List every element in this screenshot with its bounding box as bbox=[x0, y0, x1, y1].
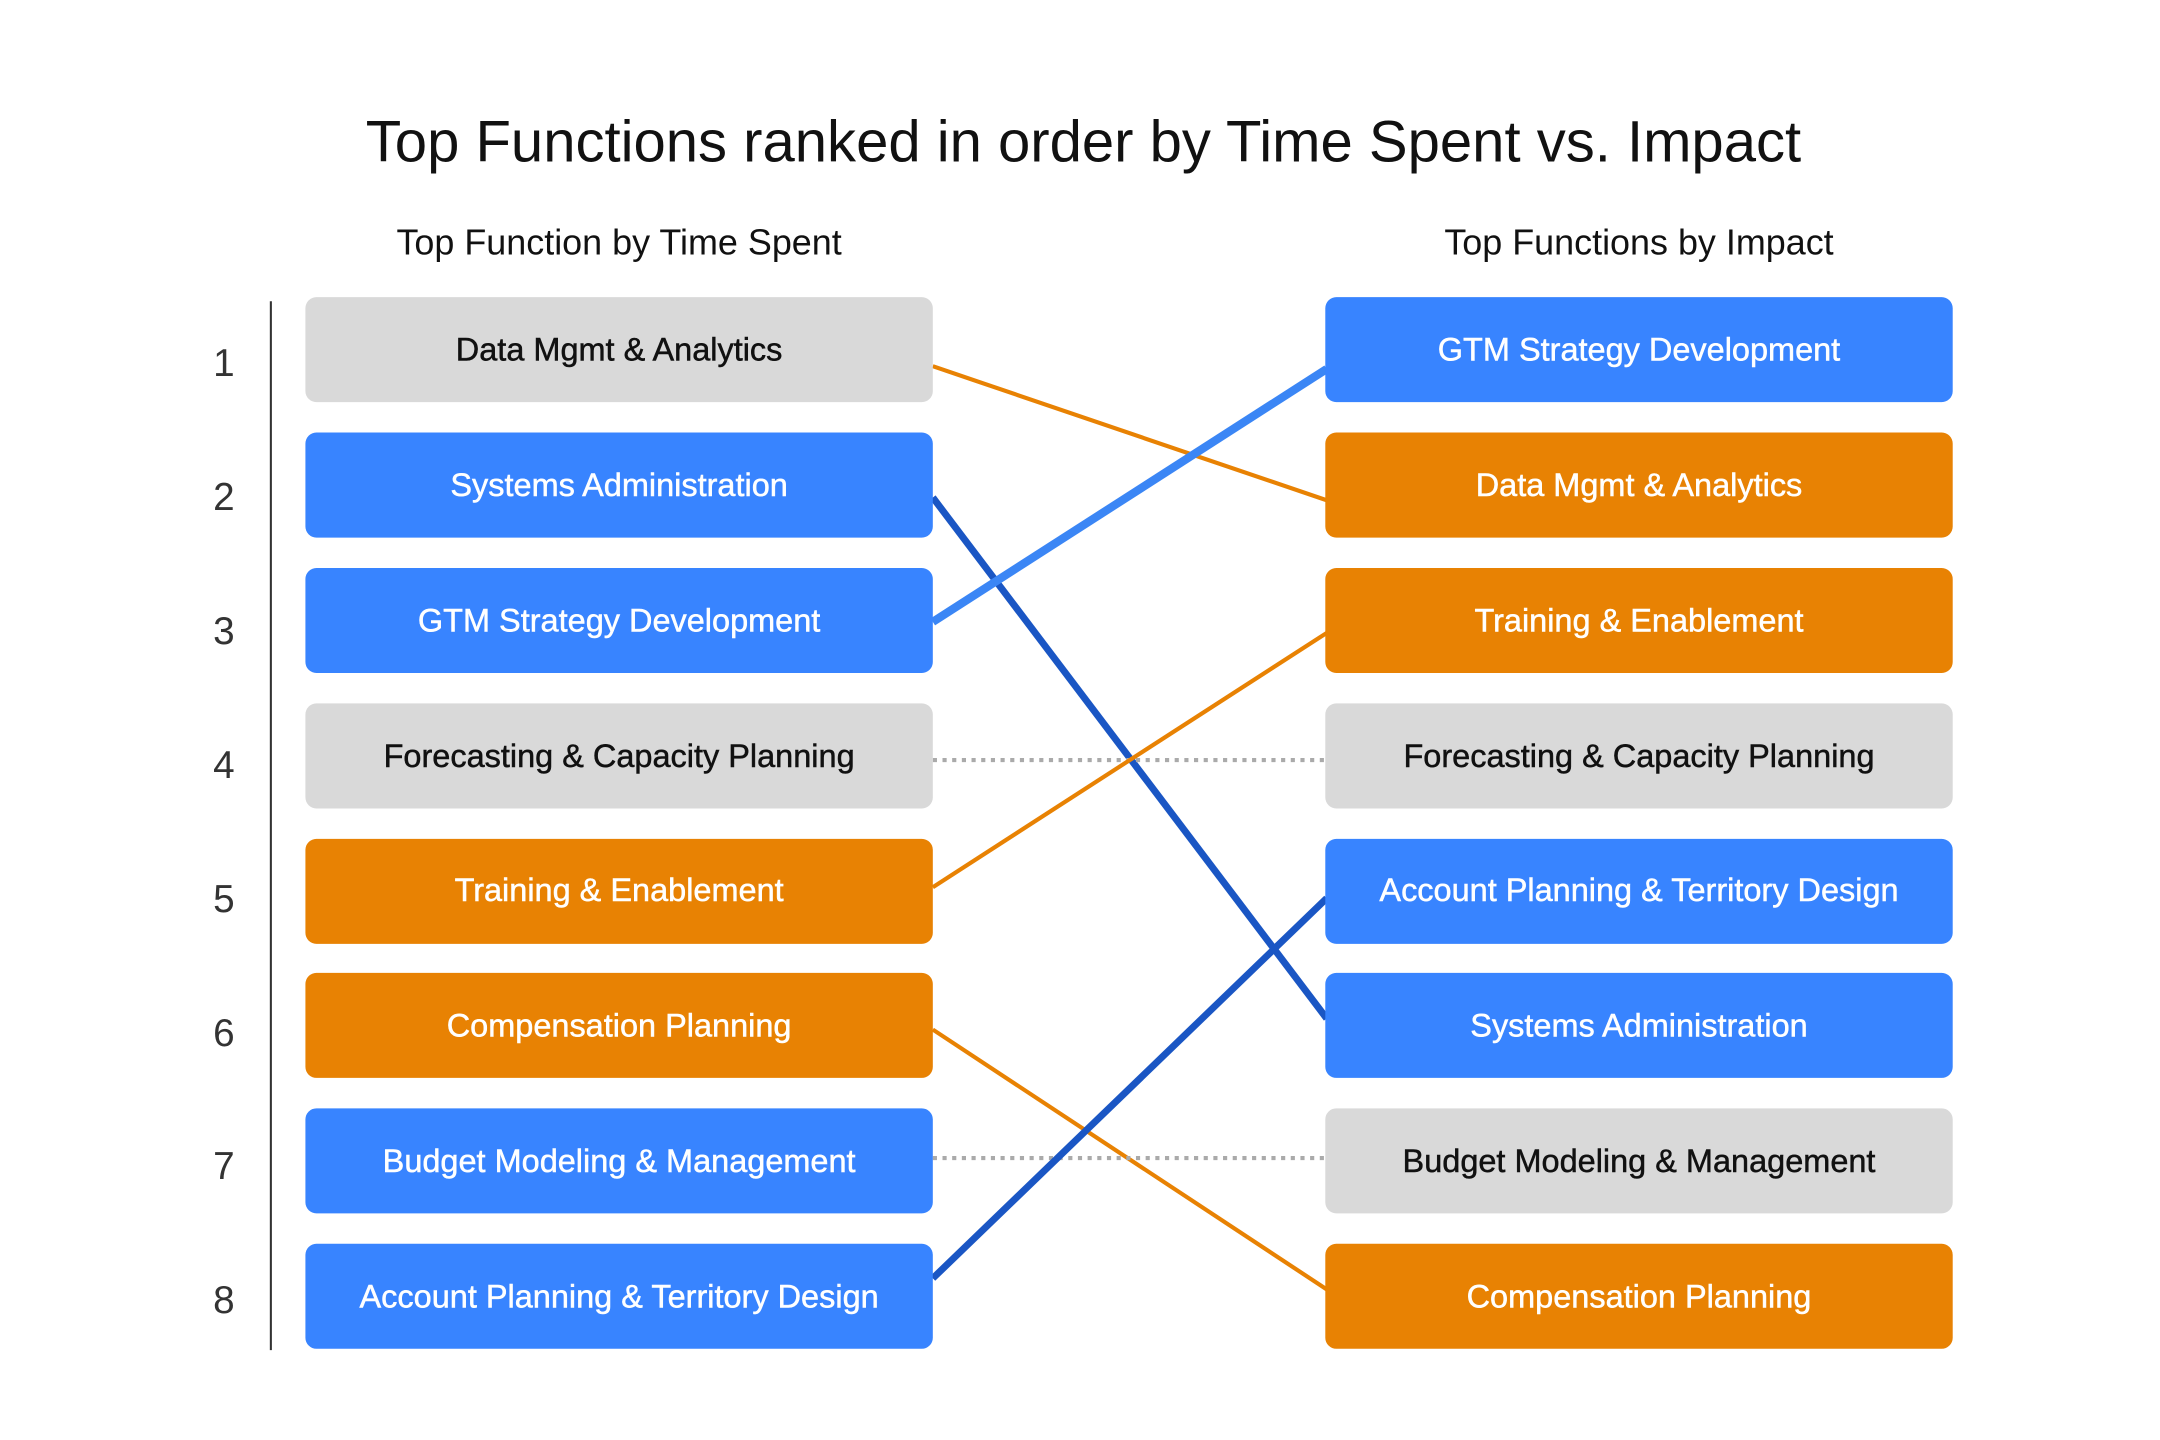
right column boxes: Account Planning & Territory Design bbox=[1379, 872, 1899, 908]
left column boxes: Compensation Planning bbox=[447, 1007, 791, 1043]
left column boxes: Training & Enablement bbox=[455, 872, 784, 908]
rank axis: 7 bbox=[213, 1145, 235, 1188]
left column boxes bbox=[305, 297, 933, 1349]
rank axis: 6 bbox=[213, 1012, 235, 1055]
connector lines bbox=[933, 366, 1327, 1289]
right column boxes bbox=[1325, 297, 1953, 1349]
heading: left column: Top Function by Time Spent bbox=[396, 221, 842, 262]
left column boxes: Budget Modeling & Management bbox=[383, 1143, 856, 1179]
heading: right column: Top Functions by Impact bbox=[1444, 221, 1834, 262]
right column boxes: Budget Modeling & Management bbox=[1403, 1143, 1875, 1179]
rank axis: 5 bbox=[213, 878, 235, 921]
right column boxes: Data Mgmt & Analytics bbox=[1476, 467, 1802, 503]
rank axis bbox=[213, 301, 271, 1350]
left column boxes: Forecasting & Capacity Planning bbox=[384, 738, 855, 774]
left column boxes: Account Planning & Territory Design bbox=[360, 1278, 879, 1314]
rank axis: 4 bbox=[213, 744, 235, 787]
rank axis: 2 bbox=[213, 476, 235, 519]
left column boxes: GTM Strategy Development bbox=[418, 603, 820, 639]
title: Top Functions ranked in order by Time Spent vs. Impact bbox=[366, 110, 1801, 175]
right column boxes: Systems Administration bbox=[1470, 1007, 1808, 1043]
right column boxes: GTM Strategy Development bbox=[1438, 332, 1840, 368]
rank axis: 3 bbox=[213, 610, 235, 653]
right column boxes: Training & Enablement bbox=[1474, 603, 1804, 639]
right column boxes: Forecasting & Capacity Planning bbox=[1403, 738, 1875, 774]
rank axis: 1 bbox=[213, 342, 235, 385]
right column boxes: Compensation Planning bbox=[1467, 1278, 1811, 1314]
left column boxes: Data Mgmt & Analytics bbox=[456, 332, 782, 368]
rank axis: 8 bbox=[213, 1279, 235, 1322]
left column boxes: Systems Administration bbox=[450, 467, 788, 503]
